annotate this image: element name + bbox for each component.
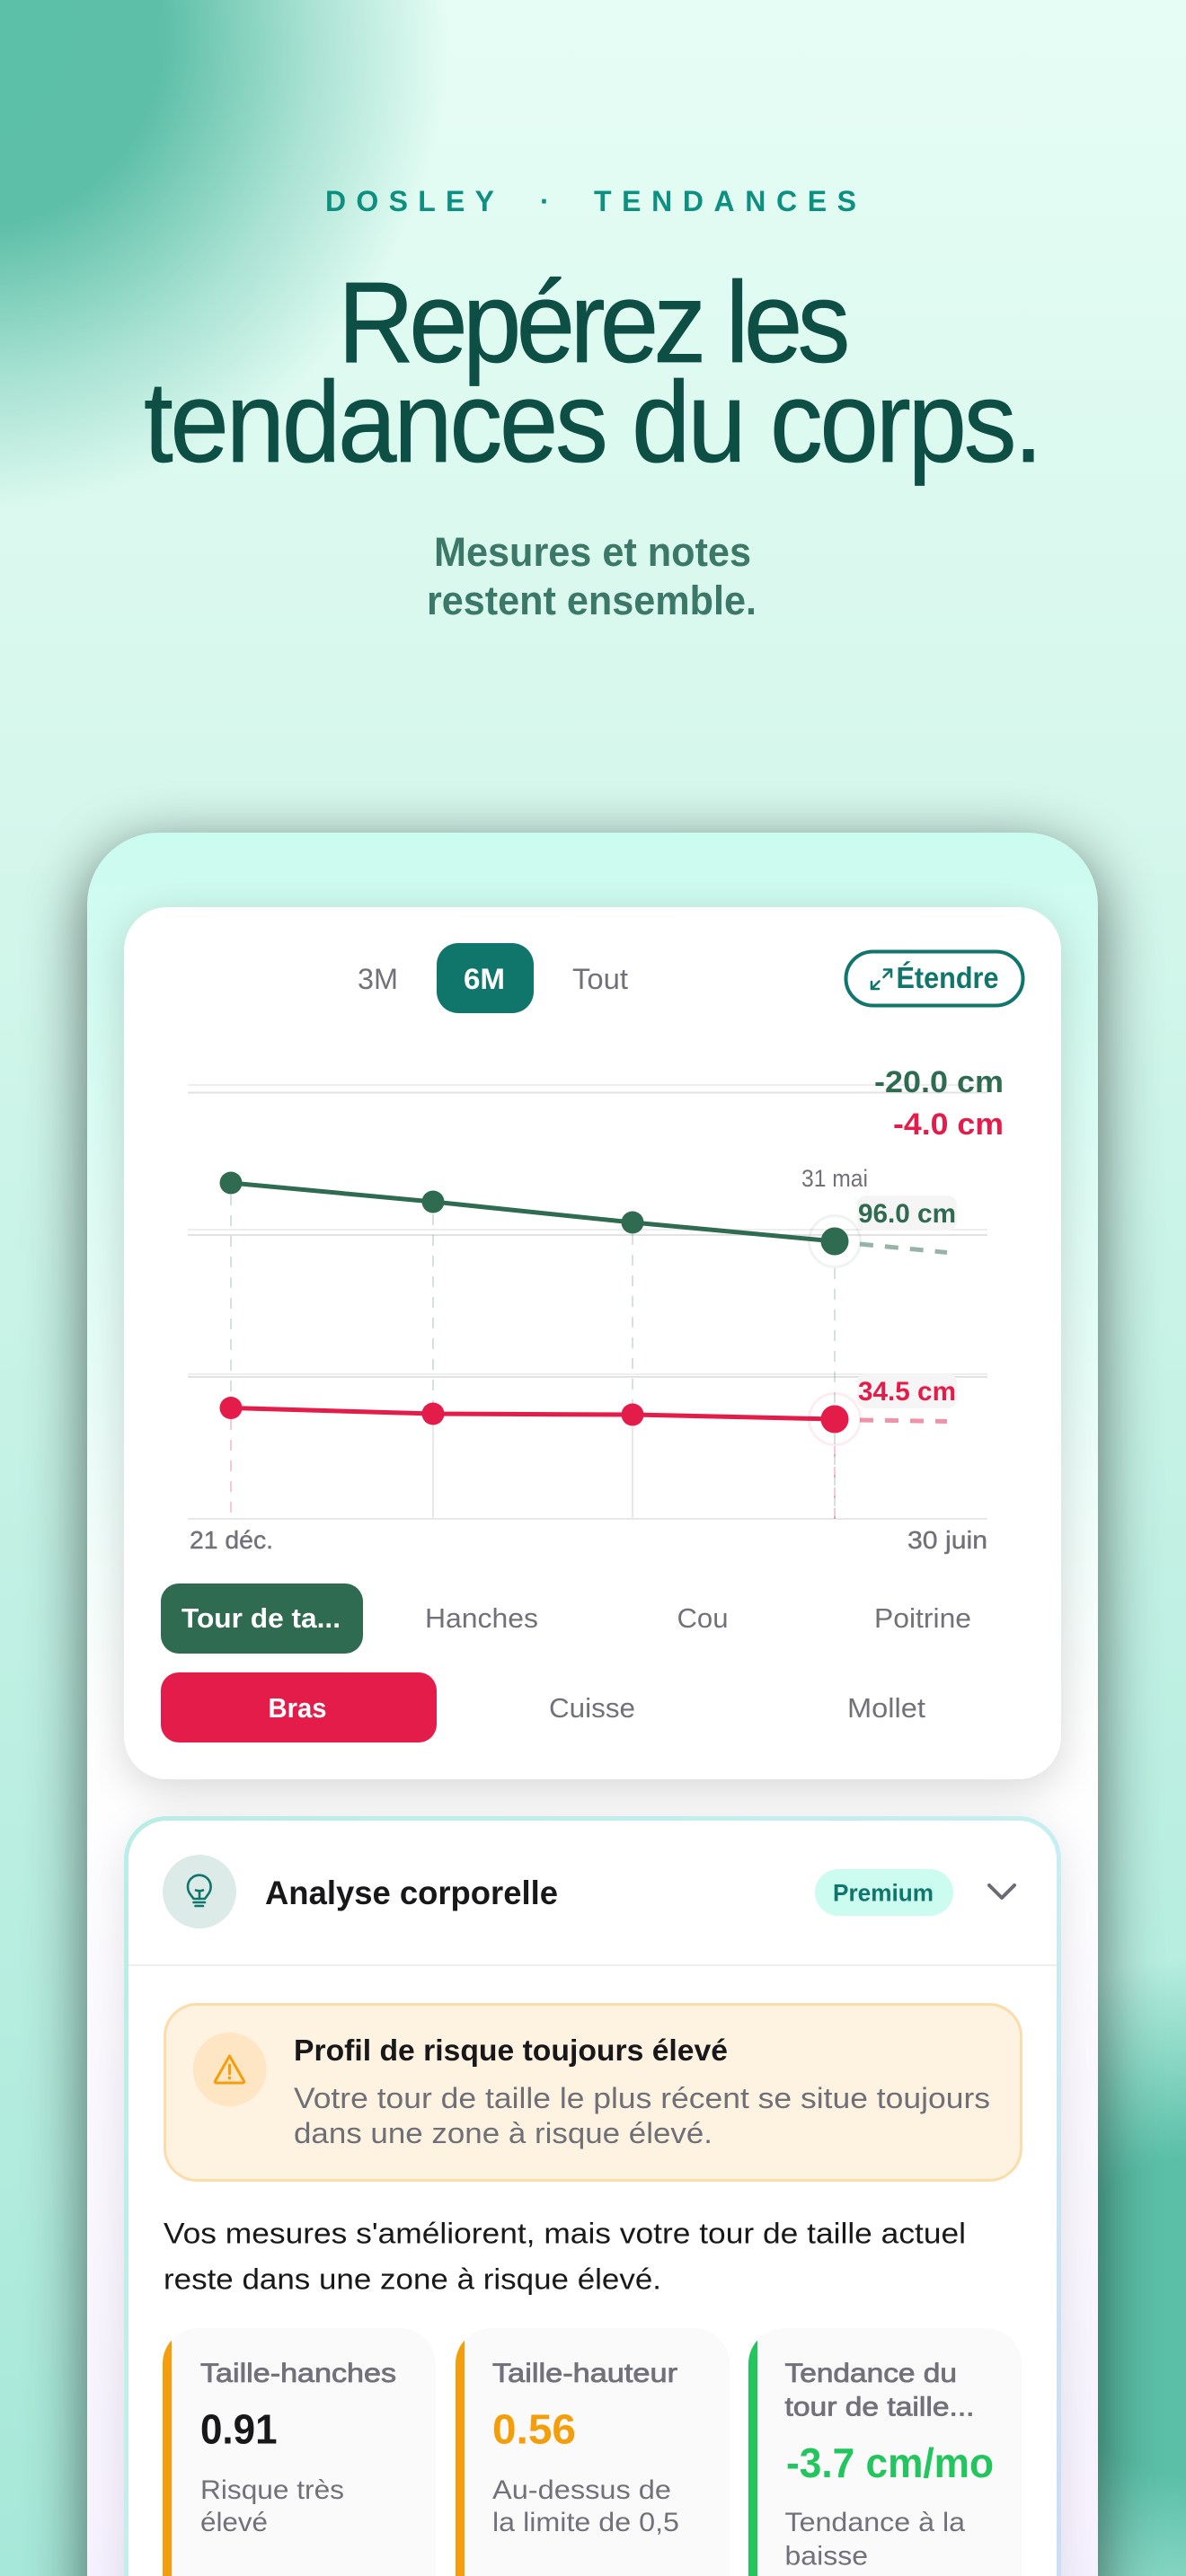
stat card: waist trend: baisse <box>785 2542 868 2571</box>
date marker: 31 mai <box>801 1165 868 1192</box>
stat card: waist-height <box>456 2328 730 2576</box>
expand button <box>846 952 1022 1006</box>
stat card: waist trend: Tendance à la <box>785 2508 965 2537</box>
change totals <box>874 1065 1004 1142</box>
premium badge: Premium <box>833 1879 934 1906</box>
axis labels <box>190 1526 987 1554</box>
callout: risk profile: dans une zone à risque élevé. <box>294 2117 712 2149</box>
value label: arm: 34.5 cm <box>858 1377 956 1407</box>
stat card: waist trend: tour de taille... <box>785 2393 974 2422</box>
range tabs <box>358 943 628 1013</box>
brand eyebrow <box>325 185 856 217</box>
arm series <box>219 1394 947 1444</box>
phone shadow <box>87 849 1098 2576</box>
metric chips: Hanches <box>425 1602 538 1634</box>
panel: body analysis <box>124 1816 1061 2576</box>
metric chips: Poitrine <box>874 1602 971 1634</box>
summary text <box>164 2217 966 2296</box>
brand eyebrow: DOSLEY <box>325 185 494 217</box>
expand button: Étendre <box>897 961 999 994</box>
change totals: -20.0 cm <box>874 1065 1004 1099</box>
subtitle: Mesures et notes <box>434 529 751 575</box>
panel: chart card <box>124 907 1061 1779</box>
stat card: waist-hip <box>163 2328 436 2576</box>
title: tendances du corps. <box>144 359 1043 487</box>
analysis card shadow <box>124 1825 1061 2576</box>
brand eyebrow: · <box>540 185 550 217</box>
stat card: waist-height: Taille-hauteur <box>492 2359 677 2388</box>
heading: Analyse corporelle <box>265 1875 558 1911</box>
chart card shadow <box>124 916 1061 1788</box>
stat card: waist-height: Au-dessus de <box>492 2475 671 2505</box>
axis labels: 21 déc. <box>190 1526 273 1554</box>
subtitle: restent ensemble. <box>427 578 757 623</box>
stat card: waist-height: 0.56 <box>492 2405 576 2452</box>
stat card: waist-hip: Taille-hanches <box>200 2359 396 2388</box>
range tabs: 6M <box>464 963 505 995</box>
callout: risk profile <box>165 2005 1021 2181</box>
summary text: Vos mesures s'améliorent, mais votre tour de taille actuel <box>164 2217 966 2249</box>
metric chips: Mollet <box>847 1692 925 1724</box>
title <box>144 260 1043 487</box>
icon: expand arrows <box>872 970 891 989</box>
metric chips: Cuisse <box>549 1692 635 1724</box>
line chart <box>188 1065 1004 1554</box>
metric chips: Cou <box>677 1602 728 1634</box>
icon: warning <box>193 2033 267 2106</box>
brand eyebrow: TENDANCES <box>594 185 856 217</box>
phone frame <box>87 833 1098 2576</box>
metric chips: Bras <box>268 1692 327 1724</box>
metric chips: Tour de ta... <box>181 1602 341 1634</box>
icon: light bulb <box>163 1855 236 1928</box>
icon: chevron <box>989 1885 1014 1898</box>
change totals: -4.0 cm <box>893 1107 1004 1142</box>
summary text: reste dans une zone à risque élevé. <box>164 2263 661 2296</box>
title: Repérez les <box>338 260 850 387</box>
stat card: waist-hip: 0.91 <box>200 2405 277 2452</box>
premium badge <box>815 1869 953 1916</box>
callout: risk profile: Profil de risque toujours élevé <box>294 2033 728 2067</box>
stat card: waist-hip: élevé <box>200 2508 268 2537</box>
stat card: waist-height: la limite de 0,5 <box>492 2508 679 2537</box>
waist series <box>219 1171 947 1266</box>
range tabs: 3M <box>358 963 398 995</box>
value label: waist: 96.0 cm <box>858 1199 956 1229</box>
stat card: waist trend: Tendance du <box>785 2359 957 2388</box>
range tabs: Tout <box>572 963 628 995</box>
subtitle <box>427 529 757 623</box>
stat card: waist trend: -3.7 cm/mo <box>786 2439 994 2486</box>
metric chips <box>161 1584 971 1742</box>
stat card: waist-hip: Risque très <box>200 2475 344 2505</box>
callout: risk profile: Votre tour de taille le plus récent se situe toujours <box>294 2082 990 2114</box>
axis labels: 30 juin <box>907 1526 987 1554</box>
stat card: waist trend <box>748 2328 1022 2576</box>
